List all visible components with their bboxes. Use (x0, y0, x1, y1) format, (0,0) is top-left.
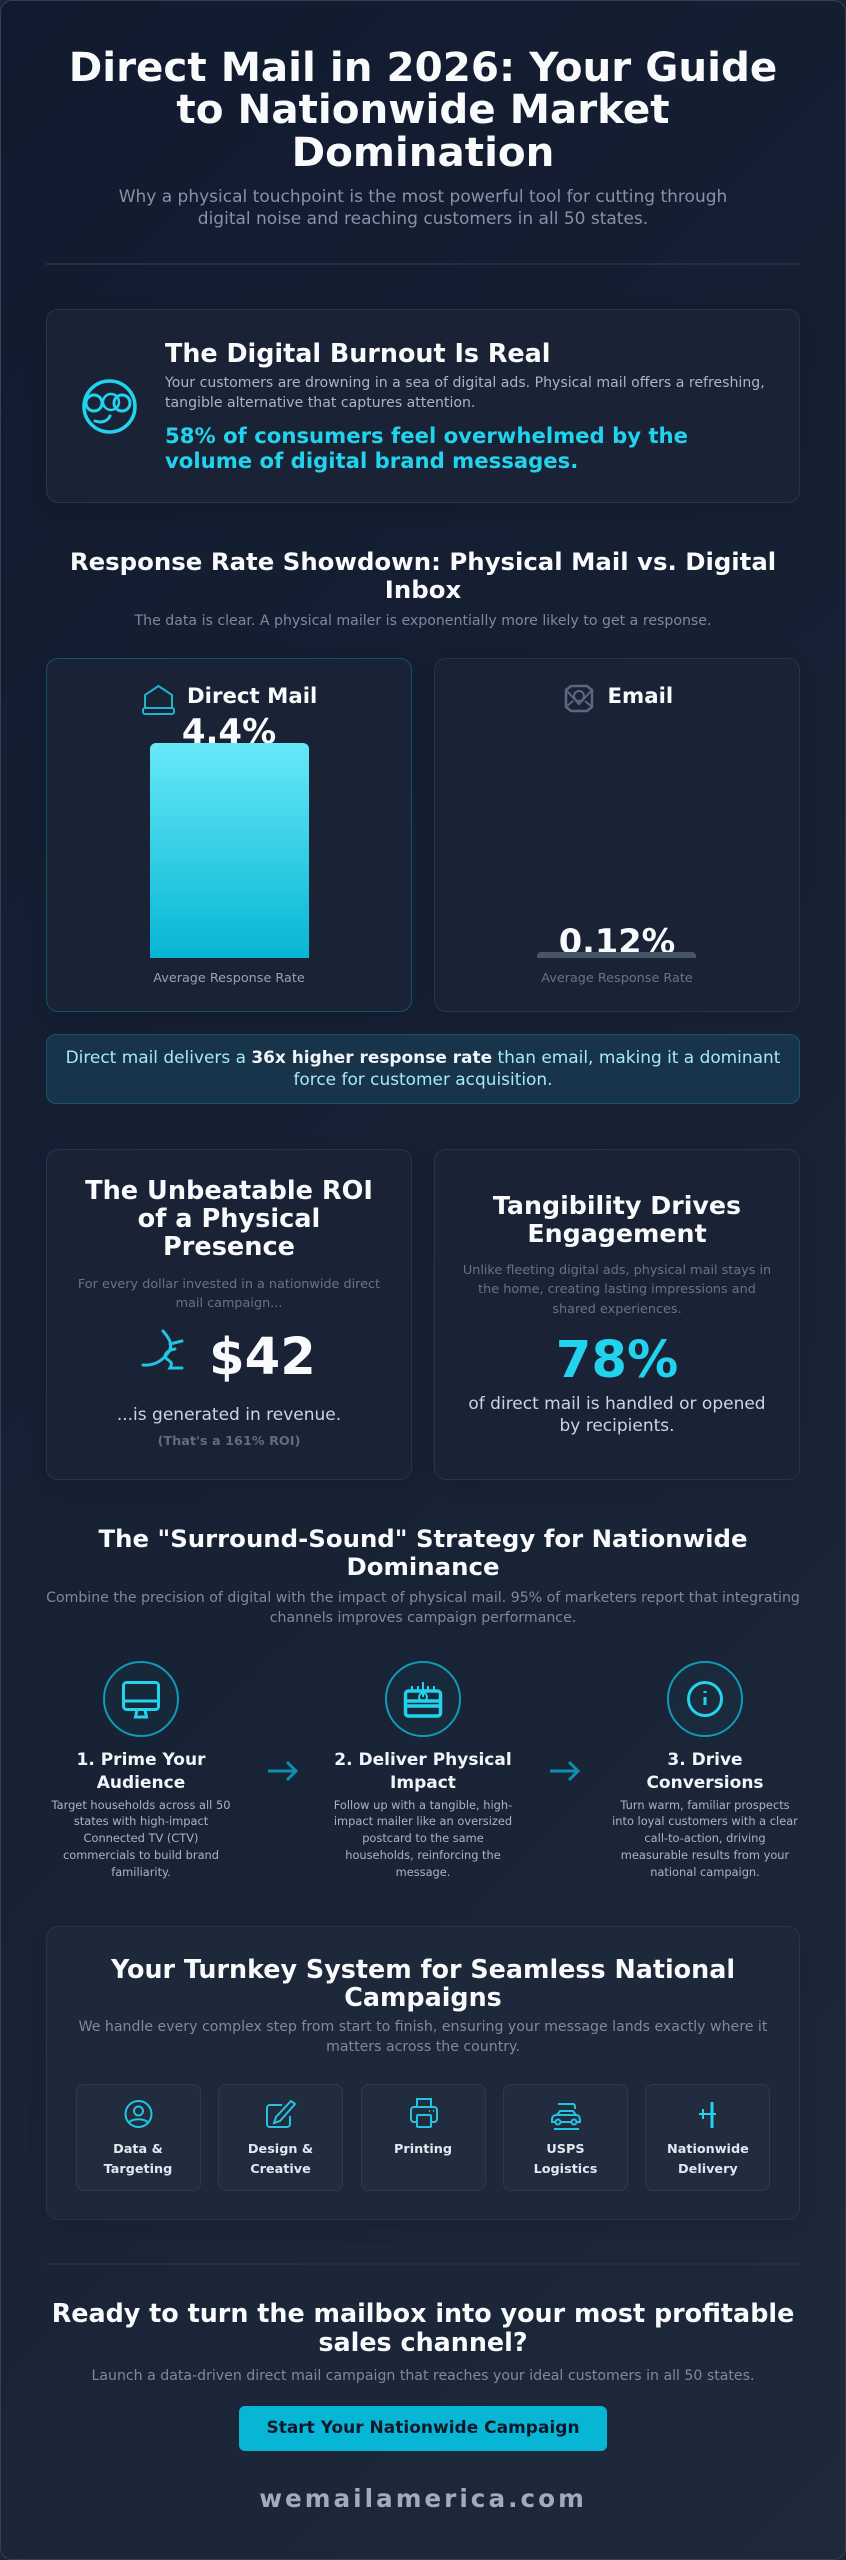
key stat: 58% of consumers feel overwhelmed by the (165, 422, 688, 448)
body text: Unlike fleeting digital ads, physical mail stays in (463, 1262, 771, 1278)
icon: growth (142, 1329, 184, 1370)
step title (77, 1750, 206, 1793)
heading: strategy (98, 1524, 748, 1581)
label (248, 2142, 313, 2176)
heading: call to action: sales channel? (318, 2327, 528, 2357)
step title: Impact (390, 1773, 456, 1793)
step text: impact mailer like an oversized (334, 1814, 512, 1828)
step text: Target households across all 50 (52, 1798, 230, 1812)
caption (468, 1394, 766, 1436)
subtitle: Why a physical touchpoint is the most powerful tool for cutting through (119, 186, 727, 206)
card: design (218, 2084, 343, 2191)
body text (165, 374, 765, 410)
label: Targeting (104, 2162, 172, 2176)
icon: pencil (266, 2100, 296, 2128)
step text: national campaign. (650, 1865, 760, 1879)
panel: digital burnout (46, 309, 800, 503)
label: Nationwide (667, 2142, 749, 2156)
label: USPS (546, 2142, 585, 2156)
subtitle: digital noise and reaching customers in all 50 states. (198, 209, 648, 229)
step text (51, 1798, 230, 1879)
step title (334, 1750, 512, 1793)
step text: familiarity. (111, 1865, 171, 1879)
title: Direct Mail in 2026: Your Guide (69, 43, 777, 91)
icon: truck (551, 2103, 581, 2130)
panel: turnkey system (46, 1926, 800, 2220)
card: delivery (645, 2084, 770, 2191)
step title (646, 1750, 764, 1793)
heading: strategy: Dominance (347, 1552, 499, 1581)
caption: Average Response Rate (153, 971, 305, 986)
value: 4.4%: 4.4% (182, 712, 276, 752)
card: data (76, 2084, 200, 2191)
body text (463, 1262, 771, 1317)
body text: the home, creating lasting impressions and (478, 1282, 756, 1297)
panel: tangibility (434, 1149, 800, 1480)
icon: printer (410, 2098, 438, 2128)
icon: info (667, 1661, 743, 1737)
step text: households, reinforcing the (345, 1848, 501, 1862)
value: $42: $42 (209, 1327, 316, 1387)
subheading: strategy (46, 1590, 800, 1626)
card: printing (360, 2084, 486, 2191)
body text: For every dollar invested in a nationwide direct (78, 1276, 380, 1292)
heading: Campaigns (344, 1982, 502, 2012)
step text: Turn warm, familiar prospects (620, 1798, 790, 1812)
step 2 (334, 1661, 512, 1879)
body text: matters across the country. (326, 2039, 520, 2055)
heading: call to action (52, 2298, 794, 2357)
title: Domination (292, 128, 554, 176)
heading: of a Physical (138, 1204, 320, 1234)
icon: mail bell (142, 684, 175, 715)
step text: states with high-impact (74, 1814, 208, 1828)
key stat: volume of digital brand messages. (165, 448, 578, 473)
icon: mailer (385, 1661, 461, 1737)
text: call to action: Launch a data-driven direct mail campaign that reaches your ideal customers in all 50 states. (92, 2368, 754, 2384)
body text (78, 1276, 380, 1311)
label: Creative (250, 2162, 311, 2176)
heading: call to action: Ready to turn the mailbox into your most profitable (52, 2298, 794, 2328)
caption: Average Response Rate (541, 971, 693, 986)
step text: measurable results from your (621, 1848, 789, 1862)
step text: postcard to the same (362, 1831, 484, 1845)
heading: Tangibility Drives (493, 1191, 741, 1220)
label: Printing (394, 2142, 452, 2156)
heading: The Digital Burnout Is Real (165, 338, 550, 368)
heading: The Unbeatable ROI (85, 1176, 373, 1206)
title (69, 43, 777, 176)
body text: Your customers are drowning in a sea of digital ads. Physical mail offers a refreshing, (165, 374, 765, 390)
label (667, 2142, 749, 2176)
panel: direct mail (46, 658, 412, 1012)
subheading: strategy: channels improves campaign performance. (270, 1610, 576, 1626)
label: email: Email (608, 684, 673, 709)
caption: by recipients. (559, 1416, 675, 1436)
step title: Audience (97, 1773, 185, 1793)
body text: mail campaign... (176, 1296, 282, 1311)
arrow 1 (268, 1761, 298, 1781)
step text: Connected TV (CTV) (84, 1831, 198, 1845)
icon: email (564, 684, 594, 712)
step title: 1. Prime Your (77, 1750, 205, 1770)
icon: plane (699, 2102, 716, 2128)
label: Design & (248, 2142, 313, 2156)
icon: overwhelmed face (82, 379, 137, 434)
value: 0.12%: 0.12% (559, 922, 675, 961)
step text (334, 1798, 512, 1879)
heading: response rate (70, 547, 776, 604)
step text (612, 1798, 798, 1879)
body text: shared experiences. (552, 1302, 682, 1317)
icon: user (124, 2100, 152, 2128)
callout: 36x: Direct mail delivers a 36x higher response rate than email, making it a dominant (66, 1047, 780, 1067)
label: direct mail: Direct Mail (187, 684, 317, 709)
label: Logistics (534, 2162, 597, 2176)
step title: 2. Deliver Physical (334, 1750, 512, 1770)
label: Data & (113, 2142, 163, 2156)
callout: 36x (46, 1034, 800, 1104)
heading (85, 1176, 373, 1262)
subheading: strategy: Combine the precision of digital with the impact of physical mail. 95% of marketers report that integrating (46, 1590, 800, 1606)
step text: call-to-action, driving (644, 1831, 766, 1845)
step text: message. (396, 1865, 450, 1879)
key stat (165, 422, 688, 473)
step title: Conversions (646, 1773, 764, 1793)
subheading: response rate: The data is clear. A physical mailer is exponentially more likely to get a response. (134, 613, 711, 629)
body text (79, 2019, 768, 2055)
heading: Engagement (527, 1219, 707, 1248)
title: to Nationwide Market (176, 85, 670, 133)
heading: Your Turnkey System for Seamless National (111, 1954, 735, 1984)
heading: response rate: Inbox (385, 575, 461, 604)
step text: commercials to build brand (63, 1848, 219, 1862)
callout: 36x: force for customer acquisition. (293, 1069, 553, 1089)
step 3 (612, 1661, 798, 1879)
label (104, 2142, 172, 2176)
body text: tangible alternative that captures attention. (165, 394, 475, 410)
ROI note: (That's a 161% ROI) (158, 1434, 300, 1449)
body text: We handle every complex step from start to finish, ensuring your message lands exactly where it (79, 2019, 767, 2035)
button (239, 2406, 607, 2451)
heading: response rate: Response Rate Showdown: Physical Mail vs. Digital (70, 547, 776, 576)
step 1 (51, 1661, 230, 1879)
card: logistics (503, 2084, 628, 2191)
step text: Follow up with a tangible, high- (334, 1798, 512, 1812)
heading: Presence (163, 1232, 295, 1262)
panel: ROI (46, 1149, 412, 1480)
panel: email (434, 658, 800, 1012)
revenue text: ...is generated in revenue. (117, 1405, 341, 1425)
step title: 3. Drive (667, 1750, 743, 1770)
arrow 2 (550, 1761, 580, 1781)
label (534, 2142, 597, 2176)
value: 78%: 78% (556, 1330, 678, 1390)
heading (493, 1191, 741, 1248)
label: Delivery (678, 2162, 738, 2176)
subtitle (119, 186, 727, 229)
bar: email (537, 952, 696, 958)
step text: into loyal customers with a clear (612, 1814, 798, 1828)
icon: monitor (103, 1661, 179, 1737)
footer url: wemailamerica.com (259, 2484, 587, 2513)
button: Start Your Nationwide Campaign (266, 2418, 580, 2438)
caption: of direct mail is handled or opened (468, 1394, 766, 1414)
bar: direct mail (150, 743, 309, 958)
heading: strategy: The "Surround-Sound" Strategy for Nationwide (98, 1524, 748, 1553)
heading (110, 1954, 735, 2012)
